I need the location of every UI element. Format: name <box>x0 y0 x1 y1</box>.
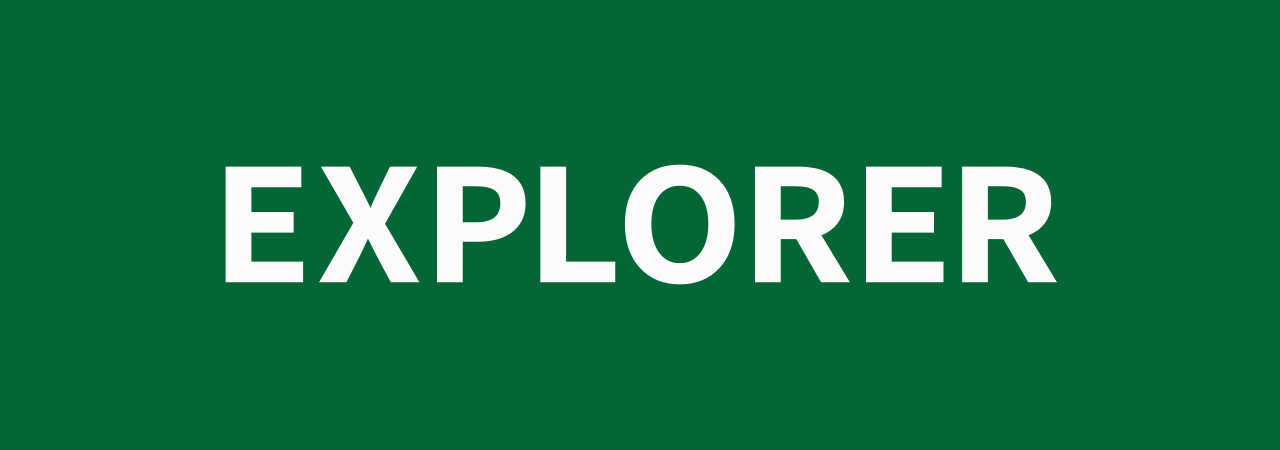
title: EXPLORER <box>212 103 1059 326</box>
